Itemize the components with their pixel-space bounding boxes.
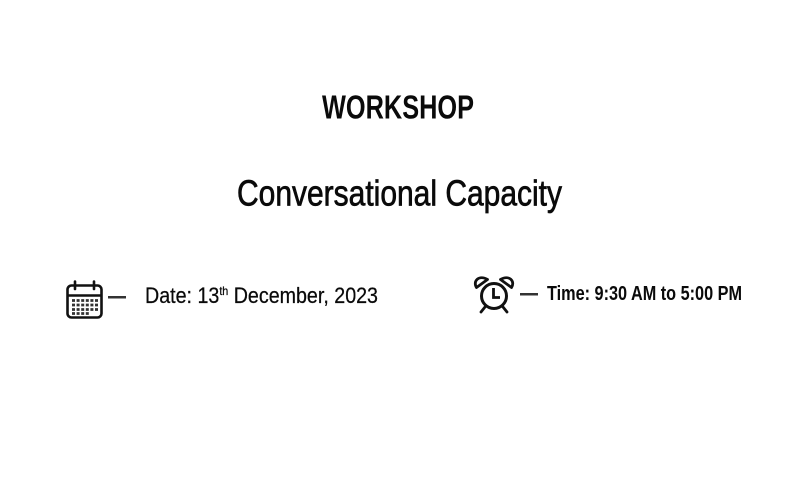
date text: Date: 13 <box>145 283 228 308</box>
heading: workshop: WORKSHOP <box>322 88 474 126</box>
icon: calendar <box>68 282 102 318</box>
icon: alarm clock <box>475 278 513 312</box>
time text: Time: 9:30 AM to 5:00 PM <box>547 283 742 305</box>
date text: th <box>219 284 228 298</box>
date text: December, 2023 <box>228 283 378 308</box>
dash after calendar <box>108 296 126 298</box>
dash after clock <box>520 293 538 296</box>
title: conversational capacity: Conversational Capacity <box>237 172 562 214</box>
